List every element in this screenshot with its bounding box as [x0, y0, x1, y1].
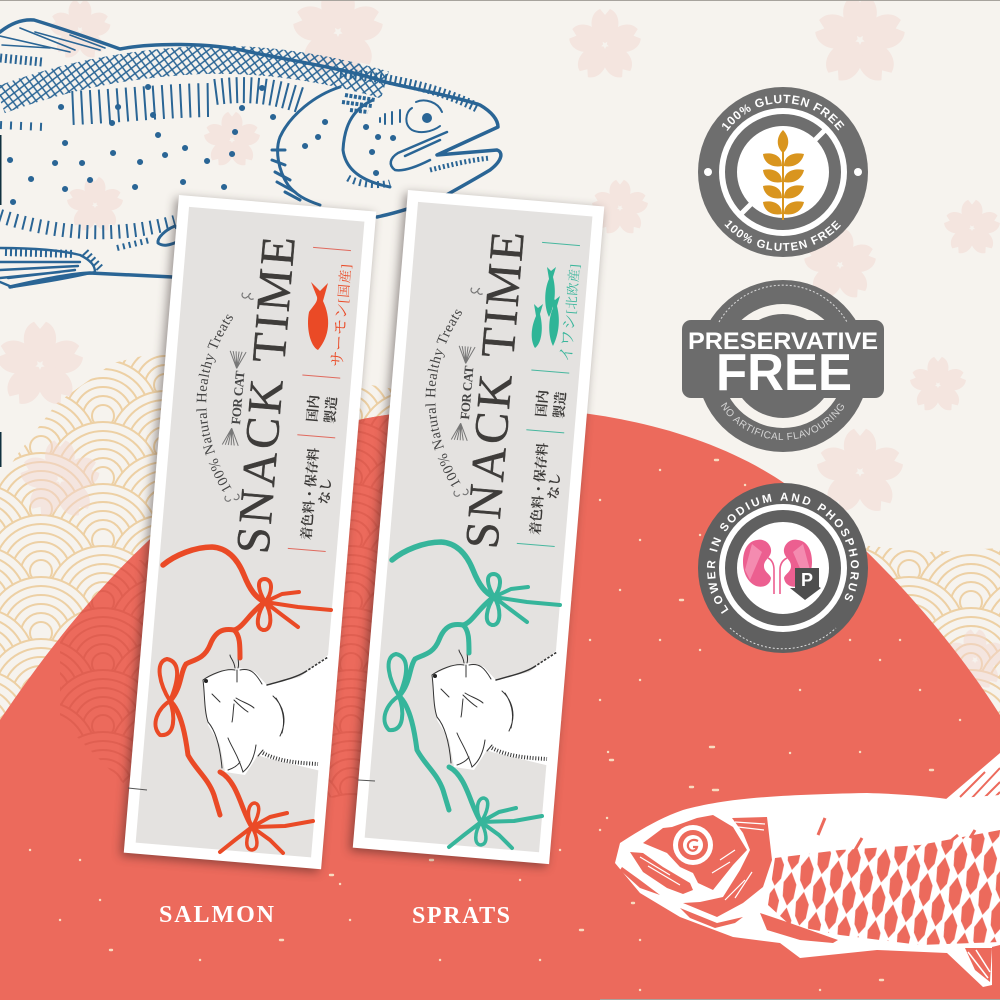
teal ribbon [384, 542, 560, 848]
badge text: LOWER IN SODIUM AND PHOSPHORUS [706, 492, 859, 614]
icon: phosphorus down arrow [790, 568, 821, 600]
for cat: FOR CAT [228, 370, 248, 425]
japanese claims: 着色料・保存料 [527, 441, 550, 535]
product title: SNACK TIME [226, 234, 306, 556]
for cat: FOR CAT [457, 365, 477, 420]
pattern: seigaiha waves on cream [0, 350, 1000, 1000]
icon: salmon [308, 282, 328, 350]
badge: gluten free [698, 87, 868, 257]
badge: preservative free: FREE [716, 344, 852, 402]
illustration: blue salmon [0, 20, 501, 287]
japanese claims: なし [317, 477, 334, 505]
flourishes [454, 288, 485, 497]
salmon eye [422, 113, 432, 123]
badge text: 100% GLUTEN FREE [722, 94, 844, 131]
red sun [0, 400, 1000, 1000]
salmon scales [0, 60, 385, 100]
icon: kidneys: P [801, 570, 813, 590]
card: salmon [115, 192, 379, 878]
illustration: white sprat [615, 753, 1000, 987]
badge: gluten free: 100% GLUTEN FREE [724, 220, 841, 251]
japanese claims: 着色料・保存料 [298, 446, 321, 540]
badge text: PRESERVATIVE [688, 328, 878, 355]
sprat tail fin [945, 753, 1000, 840]
salmon outline [0, 20, 501, 287]
sprat head [643, 815, 747, 890]
icon: three sprats [532, 267, 560, 348]
japanese claims [294, 394, 341, 542]
curved tagline: 100% Natural Healthy Treats [196, 314, 233, 492]
badge: preservative free: NO ARTIFICAL FLAVOURING [720, 402, 844, 440]
flavour label: イワシ[北欧産] [558, 263, 583, 363]
salmon gill and head [278, 87, 390, 205]
japanese claims: 製造 [321, 395, 340, 424]
cat illustration [432, 647, 561, 770]
ornaments [222, 351, 246, 446]
cat illustration [203, 652, 332, 775]
icon: kidneys [743, 540, 821, 600]
divider lines [288, 247, 351, 552]
label: sprats: SPRATS [412, 903, 510, 929]
badge: preservative free [682, 280, 884, 452]
sprat fins [760, 913, 838, 943]
divider lines [517, 242, 580, 547]
flourishes [225, 293, 256, 502]
left edge mark [0, 135, 2, 467]
salmon belly hatching [0, 216, 175, 232]
salmon lower fin [0, 248, 95, 287]
badge: lower sodium and phosphorus [698, 483, 868, 653]
product title: SNACK TIME [455, 229, 535, 551]
sprat scales [768, 830, 1000, 945]
ornaments [451, 346, 475, 441]
sakura blossoms [0, 0, 1000, 691]
japanese claims [523, 389, 570, 537]
icon: wheat [763, 130, 804, 220]
flavour label: サーモン[国産] [329, 263, 355, 368]
curved tagline: 100% Natural Healthy Treats [425, 309, 462, 487]
sprat body [615, 793, 1000, 987]
salmon spots [10, 87, 393, 202]
japanese claims: 国内 [304, 394, 322, 423]
japanese claims: 国内 [533, 389, 551, 418]
label: salmon: SALMON [159, 902, 275, 928]
japanese claims: なし [546, 472, 563, 500]
red ribbon [155, 547, 331, 853]
salmon pectoral fin [158, 226, 177, 245]
paint specks on sun [30, 455, 960, 990]
salmon dorsal fin [0, 28, 105, 52]
japanese claims: 製造 [550, 390, 569, 419]
card: sprats [344, 187, 607, 873]
sprat eye [673, 825, 713, 865]
